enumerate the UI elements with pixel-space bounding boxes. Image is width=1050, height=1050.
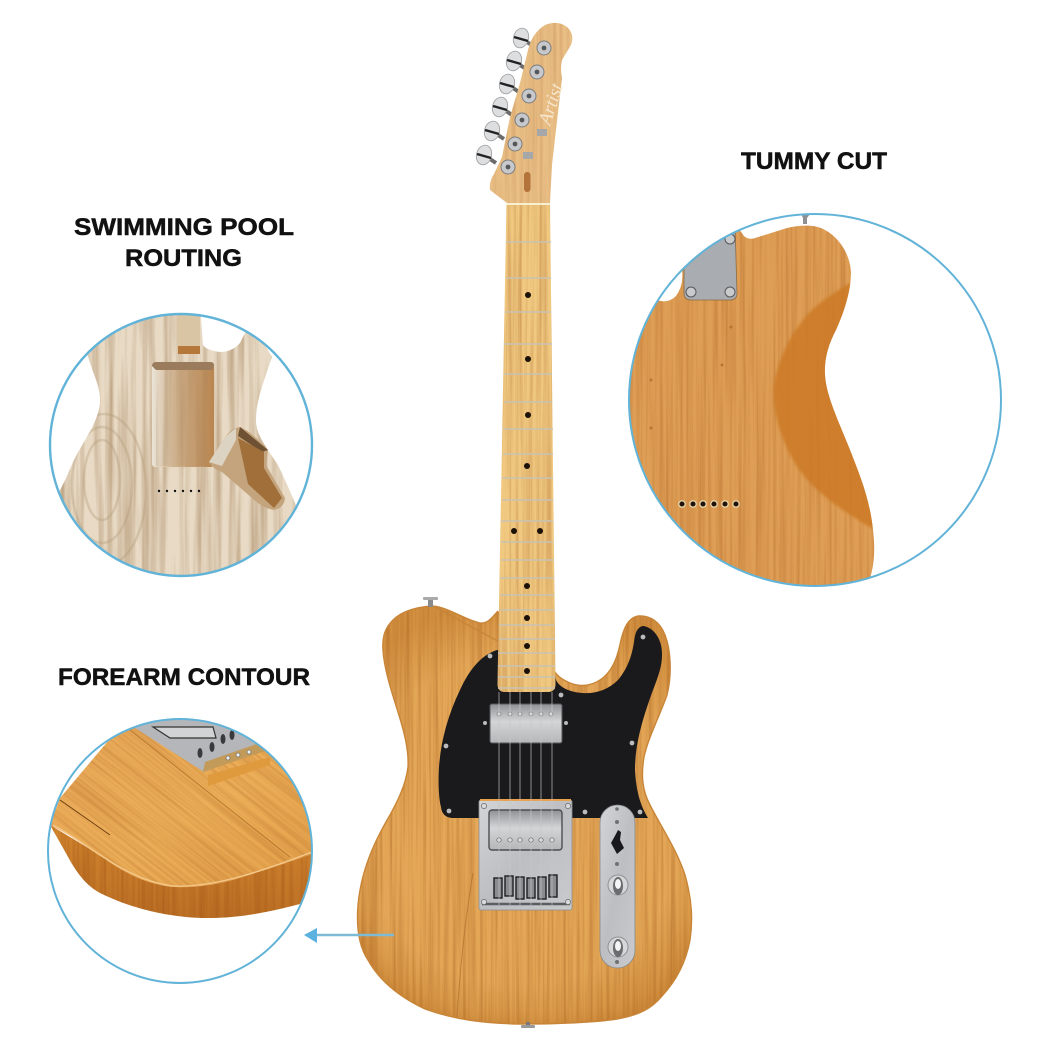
side edge [51, 826, 311, 918]
circle outline [50, 314, 312, 576]
strings [499, 692, 552, 905]
neck pickup [490, 704, 562, 743]
brass strip [208, 757, 270, 786]
circle outline [48, 719, 312, 983]
fret markers [511, 292, 543, 674]
truss rod slot [524, 172, 530, 192]
body back [630, 226, 874, 585]
strap button top [423, 597, 438, 607]
arrow [304, 928, 394, 943]
frets [498, 242, 555, 688]
circle outline [629, 214, 1001, 586]
string holes [158, 490, 200, 492]
tuners [474, 26, 533, 167]
volume knob [608, 875, 628, 895]
nut [506, 201, 550, 205]
headstock [474, 20, 575, 205]
top face [52, 728, 311, 888]
control cavity [209, 427, 285, 510]
string trees [523, 129, 547, 159]
grain rings [62, 414, 146, 566]
knots [650, 326, 732, 430]
neck plate [684, 225, 737, 300]
neck [495, 200, 557, 695]
seam line [130, 730, 290, 857]
bridge plate [135, 720, 264, 772]
guitar body [350, 600, 700, 1040]
strap button bottom [521, 1022, 535, 1028]
tummy contour [772, 282, 873, 530]
panel: forearm contour [47, 718, 313, 984]
control plate [600, 805, 635, 968]
bridge plate [479, 800, 572, 910]
logo: Artist [534, 80, 568, 129]
pickup cavity [152, 362, 214, 467]
rim highlight [53, 825, 312, 886]
saddles [494, 875, 557, 899]
panel: tummy cut [625, 212, 1001, 588]
heading: forearm contour: FOREARM CONTOUR [58, 664, 310, 691]
guitar [350, 20, 700, 1040]
panel: swimming pool routing [48, 312, 314, 578]
raw body wood [60, 315, 296, 575]
tuner posts [501, 41, 551, 174]
neck pocket [177, 314, 200, 354]
string ferrules [679, 501, 739, 507]
pickguard screws [444, 635, 645, 814]
pickguard [439, 626, 662, 818]
heading: swimming pool routing [74, 214, 294, 272]
strap button [801, 214, 810, 224]
heading: tummy cut: TUMMY CUT [741, 148, 887, 175]
bridge pickup [489, 810, 562, 850]
selector switch [611, 830, 624, 854]
heading: swimming pool routing: SWIMMING POOL [74, 214, 294, 241]
tone knob [608, 937, 628, 957]
heading: swimming pool routing: ROUTING [125, 245, 242, 272]
